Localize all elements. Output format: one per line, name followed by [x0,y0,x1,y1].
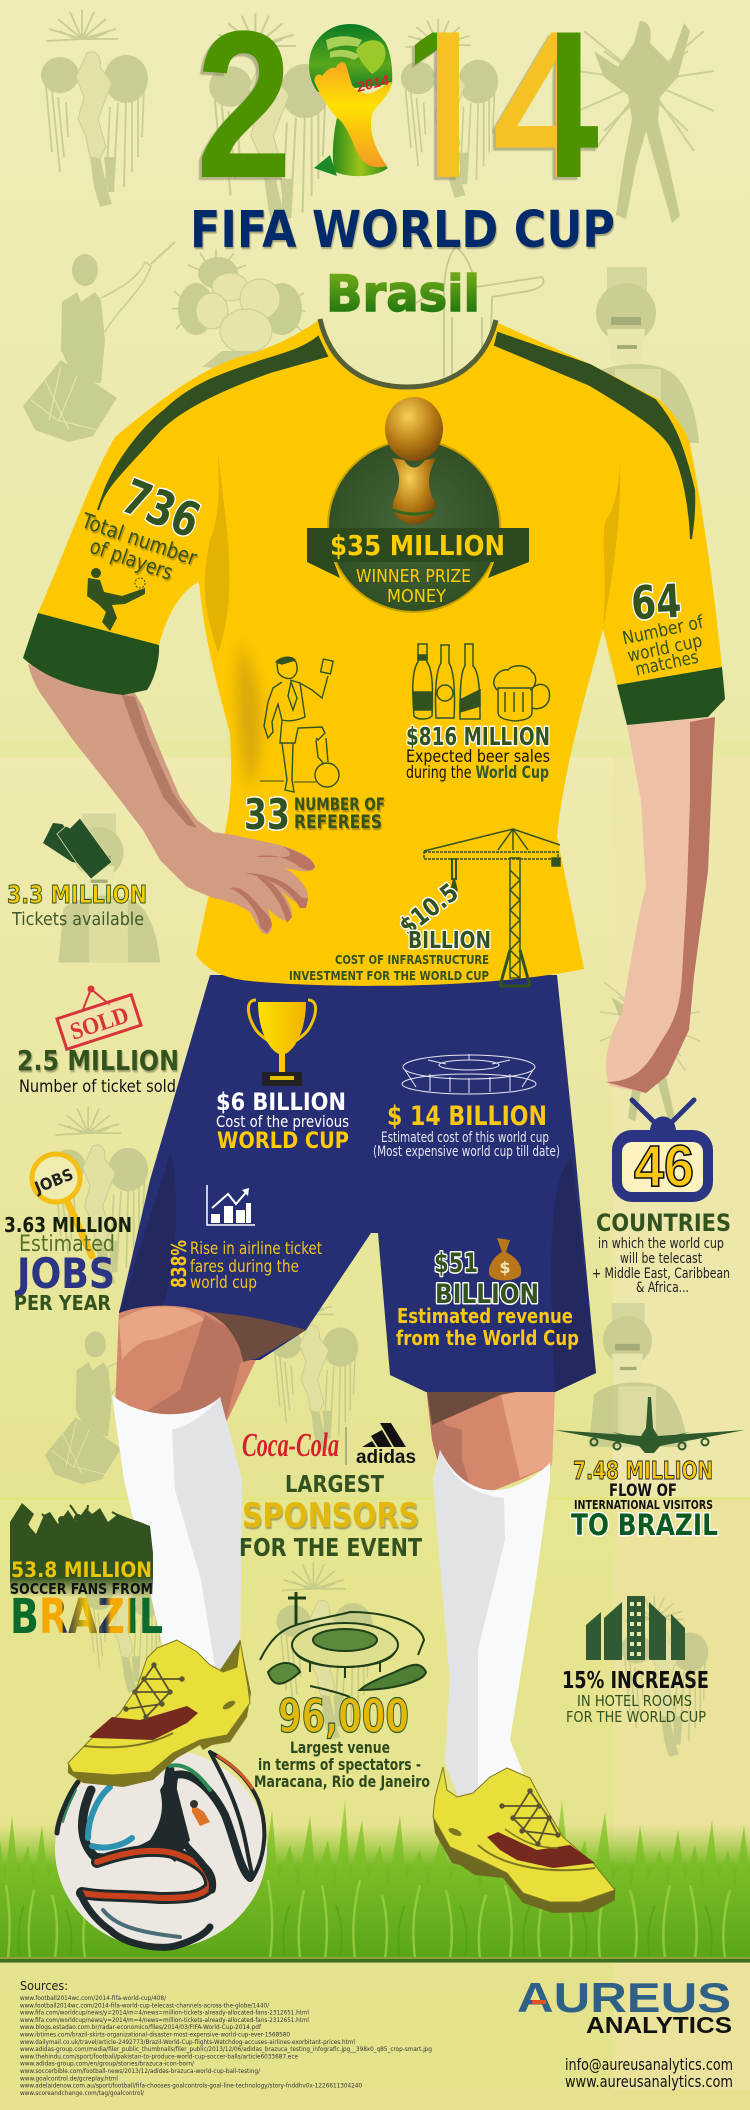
brazil: BRAZIL [10,1589,163,1645]
label: SOCCER FANS FROM [10,1580,153,1598]
logo year: 2014 [354,71,391,95]
source list: www.adidas-group.com/en/group/stories/brazuca-icon-born/ [20,2060,195,2068]
heading: COUNTRIES [596,1209,731,1237]
stat: visitors [554,1397,745,1542]
label: from the World Cup [396,1326,579,1350]
label: will be telecast [620,1251,702,1267]
icon: airplane [554,1397,745,1453]
label: COST OF INFRASTRUCTURE [335,953,489,967]
icon: hotel towers [586,1596,685,1660]
icon: kicking player [87,568,145,631]
left sock [112,1395,242,1672]
heading: FIFA World Cup: FIFA WORLD CUP [190,201,615,260]
amount: 3.63 MILLION [4,1213,132,1237]
icon: money bag: $ [499,1258,511,1277]
amount unit: BILLION [408,928,491,954]
dark band [10,1553,153,1597]
stat: referees [244,657,385,839]
icon: magnifier [31,1154,92,1256]
thigh left [115,1305,256,1440]
source list: www.thehindu.com/sport/football/pakistan-to-produce-world-cup-soccer-balls/article6033687.ece [20,2052,298,2060]
contact [565,2055,733,2091]
percentage: 838% [167,1240,191,1288]
right sock [433,1450,550,1800]
label [396,1304,579,1350]
label: Total number [78,508,200,570]
sources [20,1979,432,2097]
icon: sold sign [57,986,141,1049]
number: 64 [630,574,683,630]
title 2014 [198,30,598,180]
digit 1 [412,32,459,180]
right cuff [617,667,725,725]
icon: television [612,1100,713,1202]
label: IN HOTEL ROOMS [577,1692,692,1710]
label: FLOW OF [609,1481,677,1501]
sources heading: Sources: [20,1979,68,1993]
sub brand: ANALYTICS [586,2012,732,2038]
amount: 2.5 MILLION [17,1044,179,1077]
stat: countries [592,1100,731,1296]
label: fares during the [190,1257,299,1277]
banner [307,528,529,578]
amount: $ 14 BILLION [387,1101,547,1132]
capacity: 96,000 [278,1689,409,1743]
background silhouettes of carnival figures [23,10,714,1757]
prize amount: $35 MILLION [330,529,505,562]
label estimated: Estimated [19,1232,115,1257]
stat: venue [254,1592,430,1791]
label: Number of [621,612,706,649]
stat: 64 matches [621,574,706,681]
number: 736 [114,469,208,550]
ground line [0,1957,750,1963]
label [294,795,385,833]
label: (Most expensive world cup till date) [373,1144,560,1160]
stat: previous world cup [216,1000,349,1154]
label: Estimated cost of this world cup [381,1130,549,1146]
side panel right [551,1158,596,1392]
label: world cup [190,1273,257,1293]
label second line: during the World Cup [406,763,549,783]
stat: soccer fans [10,1503,163,1645]
source list: www.blogs.estadao.com.br/radar-economico/files/2014/03/FIFA-World-Cup-2014.pdf [20,2023,262,2031]
stat: tickets sold [17,986,179,1097]
label: FOR THE WORLD CUP [566,1708,706,1726]
thigh right [426,1385,555,1500]
heading: Brasil: Brasil [326,265,480,323]
source list: www.football2014wc.com/2014-fifa-world-cup/408/ [20,1994,167,2002]
icon: right boot [433,1767,615,1913]
sponsors: SPONSORS [242,1496,419,1536]
label: & Africa... [636,1280,689,1296]
label: REFEREES [294,811,382,833]
label [190,1239,322,1293]
icon: referee [260,657,339,792]
icon: gold cup [248,1000,316,1086]
label: Number of ticket sold [19,1077,176,1097]
icon: tickets [43,818,112,879]
source list: www.dailymail.co.uk/travel/article-2492773/Brazil-World-Cup-flights-Watchdog-accuses-airlines-exorbitant-prices.html [20,2038,355,2046]
for the event: FOR THE EVENT [239,1533,422,1562]
label: Tickets available [11,909,144,930]
icon: soccer ball [55,1749,267,1949]
grass [0,1800,750,1958]
logo: adidas [346,1423,416,1468]
source list: www.goalcontrol.de/gcreplay.html [20,2074,118,2082]
source list: www.ibtimes.com/brazil-skirts-organizational-disaster-most-expensive-world-cup-ever-1568580 [20,2030,290,2038]
icon: left boot [68,1640,251,1787]
stat: airline fares [167,1185,322,1293]
label: Largest venue [290,1738,390,1757]
shorts body [119,975,596,1392]
label: Estimated revenue [397,1304,573,1328]
icon: world cup trophy [385,397,443,525]
icon: crane [424,829,560,986]
amount rotated: $10.5 [394,878,464,941]
amount: $6 BILLION [216,1088,346,1116]
amount unit: BILLION [435,1279,539,1310]
amount: 15% INCREASE [562,1668,709,1694]
brand name: AUREUS [517,1974,731,2021]
brand: Aureus Analytics [517,1974,733,2091]
fold shadows [237,640,261,790]
icon: television: 46 [634,1134,694,1199]
label [289,953,489,983]
label: Cost of the previous [216,1112,349,1131]
shorts [115,975,596,1500]
prize label: WINNER PRIZE [356,566,471,587]
label [592,1236,730,1296]
amount: $816 MILLION [406,722,550,751]
stat: beer sales [406,644,550,783]
label: of players [87,534,176,585]
largest: LARGEST [285,1472,384,1498]
icon: magnifier: JOBS [31,1165,76,1198]
stat: hotel rooms [562,1596,709,1726]
label [254,1738,430,1791]
source list [20,1994,432,2097]
right stripe [495,333,694,539]
icon: Maracana stadium [260,1592,426,1697]
panel: prize money [307,397,529,612]
side panel left [119,1155,176,1313]
stat: tickets available [7,818,147,930]
left arm with hand [28,664,315,934]
label jobs: JOBS [14,1249,115,1298]
label: world cup [626,630,704,667]
source list: www.fifa.com/worldcup/news/y=2014/m=4/news=million-tickets-already-allocated-fans-2312651.html [20,2009,309,2017]
amount: $51 [434,1248,478,1279]
icon: beer bottles and mug [413,644,550,721]
icon: 2014 world cup logo [309,24,392,176]
prize label [356,566,471,607]
label highlight: TO BRAZIL [571,1508,718,1542]
number: 33 [244,790,290,839]
left cuff [23,613,159,695]
stat: jobs [4,1154,132,1315]
icon: crowd silhouette [10,1503,153,1553]
source list: www.fifa.com/worldcup/news/y=2014/m=4/news=million-tickets-already-allocated-fans-2312651.html [20,2016,309,2024]
stat: 736 players [78,469,208,631]
label [566,1692,706,1726]
source list: www.adelaidenow.com.au/sport/football/fifa-chooses-goalcontrols-goal-line-technology/story-fnddhv0x-1226611304240 [20,2082,362,2090]
stat: cost of this cup [373,1054,560,1160]
icon: growth chart [207,1185,255,1225]
medal circle [328,440,500,612]
icon: sold sign: SOLD [67,1002,132,1046]
source list: www.football2014wc.com/2014-fifa-world-cup-telecast-channels-across-the-globe/1440/ [20,2001,270,2009]
source list: www.soccerbible.com/football-news/2013/12/adidas-brazuca-world-cup-ball-testing/ [20,2067,261,2075]
amount: 3.3 MILLION [7,880,147,909]
icon: stadium outline [402,1054,536,1094]
label: INVESTMENT FOR THE WORLD CUP [289,969,489,983]
stat: revenue [396,1238,579,1350]
logo: adidas: adidas [356,1447,416,1468]
logo: Coca-Cola: Coca-Cola [242,1427,339,1464]
label: in terms of spectators - [258,1755,421,1774]
label [574,1481,713,1512]
left stripe [98,337,327,510]
label per year: PER YEAR [14,1291,111,1315]
right arm with hand [606,717,715,1093]
label [373,1130,560,1160]
label: Maracana, Rio de Janeiro [254,1772,430,1791]
source list: www.scoreandchange.com/tag/goalcontrol/ [20,2089,145,2097]
prize label: MONEY [387,586,447,607]
amount: 53.8 MILLION [11,1558,152,1582]
stat: infrastructure [289,829,560,986]
label: matches [633,647,700,681]
digit 4 [492,32,598,180]
label highlight: WORLD CUP [217,1129,349,1154]
source list: www.adidas-group.com/media/filer_public_thumbnails/filer_public/2013/12/06/adidas_brazuca_testing_infografic.jpg__398x0_q85_crop-smart.jpg [20,2045,432,2053]
label: Rise in airline ticket [190,1239,322,1259]
panel: sponsors [239,1423,422,1562]
shirt [38,318,722,986]
collar [320,319,496,387]
icon: money bag [489,1238,521,1280]
accent dash [532,2000,546,2004]
label: NUMBER OF [294,795,385,815]
label: Expected beer sales [406,747,550,767]
label [621,612,706,681]
